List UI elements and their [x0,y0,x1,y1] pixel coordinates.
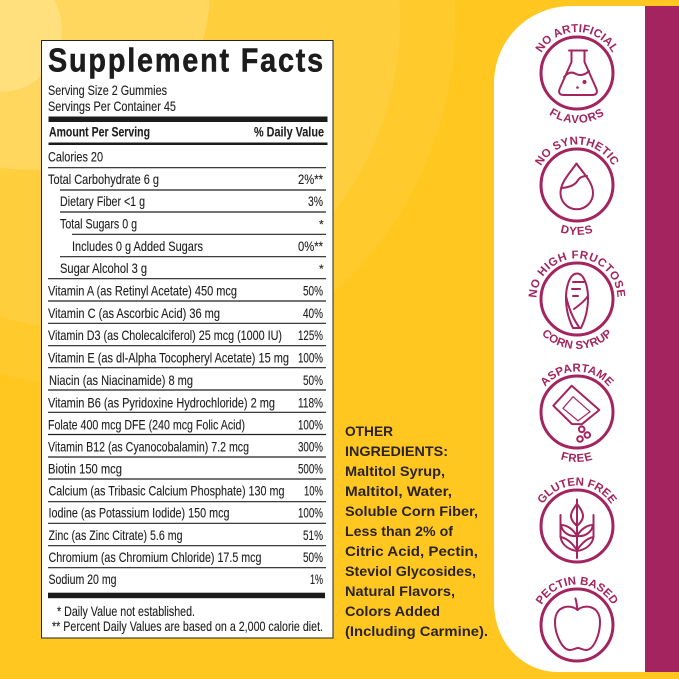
title: Supplement Facts [48,41,323,79]
row: vitamin B6: 118% [298,394,323,410]
row: calcium: Calcium (as Tribasic Calcium Phosphate) 130 mg [48,482,284,498]
serving info [48,82,176,114]
other ingredients text: INGREDIENTS: [345,443,448,459]
footnotes: * Daily Value not established. [57,603,195,619]
row: niacin: 50% [303,372,323,388]
row: sodium [48,571,323,587]
row: vitamin C: 40% [303,305,323,321]
row: iodine: 100% [298,504,323,520]
row: zinc [48,527,323,543]
icon: corn [566,274,588,328]
serving info: Servings Per Container 45 [48,98,176,114]
badge: gluten free [538,477,618,564]
row: sugar alcohol [60,260,324,276]
row: vitamin E: Vitamin E (as dl-Alpha Tocopheryl Acetate) 15 mg [48,350,289,366]
other ingredients text: OTHER [345,423,393,439]
other ingredients text: Less than 2% of [345,523,453,539]
purple side strip [645,6,679,672]
other ingredients text [345,423,488,639]
badge: aspartame free: FREE [561,452,592,462]
row: sugar alcohol: Sugar Alcohol 3 g [60,260,147,276]
row: chromium: 50% [303,549,323,565]
row: folate: Folate 400 mcg DFE (240 mcg Folic Acid) [48,416,245,432]
other ingredients text: Natural Flavors, [345,583,455,599]
icon: flask [559,50,597,95]
row dividers [48,168,326,568]
row: added sugars: Includes 0 g Added Sugars [72,238,203,254]
icon: water drop [560,164,593,209]
other ingredients text: (Including Carmine). [345,623,488,639]
badge: no artificial flavors: FLAVORS [550,108,604,123]
row: total carbohydrate: Total Carbohydrate 6 g [48,171,159,187]
row: vitamin A: Vitamin A (as Retinyl Acetate) 450 mcg [48,282,237,298]
other ingredients text: Colors Added [345,603,440,619]
badge: no synthetic dyes: NO SYNTHETIC [534,136,618,166]
footnotes: ** Percent Daily Values are based on a 2,000 calorie diet. [52,618,323,634]
row: vitamin E: 100% [298,350,323,366]
footnotes [48,593,325,634]
row: niacin [49,372,323,388]
badge: aspartame free: ASPARTAME [542,364,614,386]
badge: pectin based [536,576,618,662]
badge: no high fructose corn syrup: CORN SYRUP [543,330,610,349]
icon: apple [555,598,600,650]
row: total sugars [60,216,324,232]
badge: gluten free: GLUTEN FREE [538,477,618,504]
badge: aspartame free [540,364,614,462]
row: dietary fiber: 3% [308,193,323,209]
row: zinc: 51% [303,527,323,543]
row: biotin: Biotin 150 mcg [48,460,122,476]
row: iodine: Iodine (as Potassium Iodide) 150 mcg [48,504,230,520]
row: total sugars: Total Sugars 0 g [60,216,137,232]
row: vitamin B12: Vitamin B12 (as Cyanocobalamin) 7.2 mcg [48,438,249,454]
other ingredients text: Soluble Corn Fiber, [345,503,478,519]
serving info: Serving Size 2 Gummies [48,82,167,98]
table header: Amount Per Serving [49,124,150,140]
row: calcium: 10% [304,482,323,498]
badge: no high fructose corn syrup [528,250,626,349]
row: sugar alcohol: * [319,262,324,276]
row: folate: 100% [298,416,323,432]
row: sodium: Sodium 20 mg [48,571,116,587]
icon: wheat [560,500,594,558]
badge: no synthetic dyes: DYES [560,224,592,235]
other ingredients text: Steviol Glycosides, [345,563,476,579]
row: vitamin C: Vitamin C (as Ascorbic Acid) 36 mg [48,305,220,321]
row: sodium: 1% [310,571,323,587]
row: zinc: Zinc (as Zinc Citrate) 5.6 mg [48,527,182,543]
row: niacin: Niacin (as Niacinamide) 8 mg [49,372,193,388]
badge: no artificial flavors [535,24,616,123]
row: biotin: 500% [298,460,323,476]
table header [48,116,328,145]
row: dietary fiber [60,193,323,209]
badge: no artificial flavors: NO ARTIFICIAL [535,24,616,52]
row: biotin [48,460,323,476]
row: chromium: Chromium (as Chromium Chloride) 17.5 mcg [48,549,262,565]
other ingredients text: Maltitol Syrup, [345,463,445,479]
badge: no synthetic dyes [534,136,618,235]
row: added sugars [72,238,323,254]
row: calories: Calories 20 [48,148,103,164]
row: vitamin B6: Vitamin B6 (as Pyridoxine Hydrochloride) 2 mg [48,394,275,410]
other ingredients text: Citric Acid, Pectin, [345,543,478,559]
badge: no high fructose corn syrup: NO HIGH FRUCTOSE [528,250,626,298]
other ingredients text: Maltitol, Water, [345,483,452,499]
row: vitamin B12: 300% [298,438,323,454]
row: total carbohydrate: 2%** [298,171,323,187]
white badge panel [494,6,645,672]
row: added sugars: 0%** [298,238,323,254]
row: vitamin D3: Vitamin D3 (as Cholecalciferol) 25 mcg (1000 IU) [48,327,282,343]
supplement facts panel [42,40,333,638]
row: total carbohydrate [48,171,323,187]
badge: pectin based: PECTIN BASED [536,576,618,604]
row: dietary fiber: Dietary Fiber <1 g [60,193,145,209]
row: vitamin A: 50% [303,282,323,298]
icon: sweetener packet [553,386,599,442]
table header: % Daily Value [254,124,324,140]
row: vitamin D3: 125% [298,327,323,343]
row: total sugars: * [319,218,324,232]
